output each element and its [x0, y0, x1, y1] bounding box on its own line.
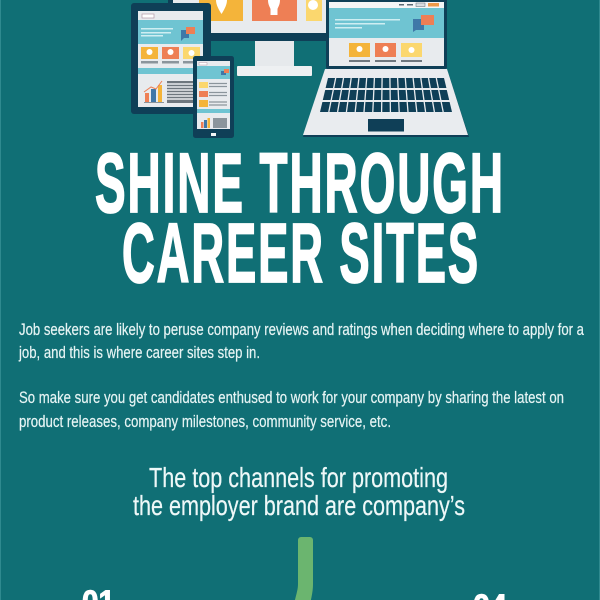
icon: desktop monitor	[168, 0, 328, 76]
icon: tablet	[131, 3, 211, 114]
section heading	[133, 462, 465, 521]
intro text block: product releases, company milestones, community service, etc.	[19, 413, 391, 431]
title	[95, 136, 505, 300]
intro text block	[18, 321, 585, 431]
icon: laptop	[303, 0, 469, 137]
section heading: the employer brand are company’s	[133, 490, 465, 521]
section heading: The top channels for promoting	[149, 462, 448, 493]
green curved connector	[294, 537, 313, 600]
icon: smartphone	[193, 56, 234, 138]
intro text block: job, and this is where career sites step in.	[18, 344, 260, 362]
